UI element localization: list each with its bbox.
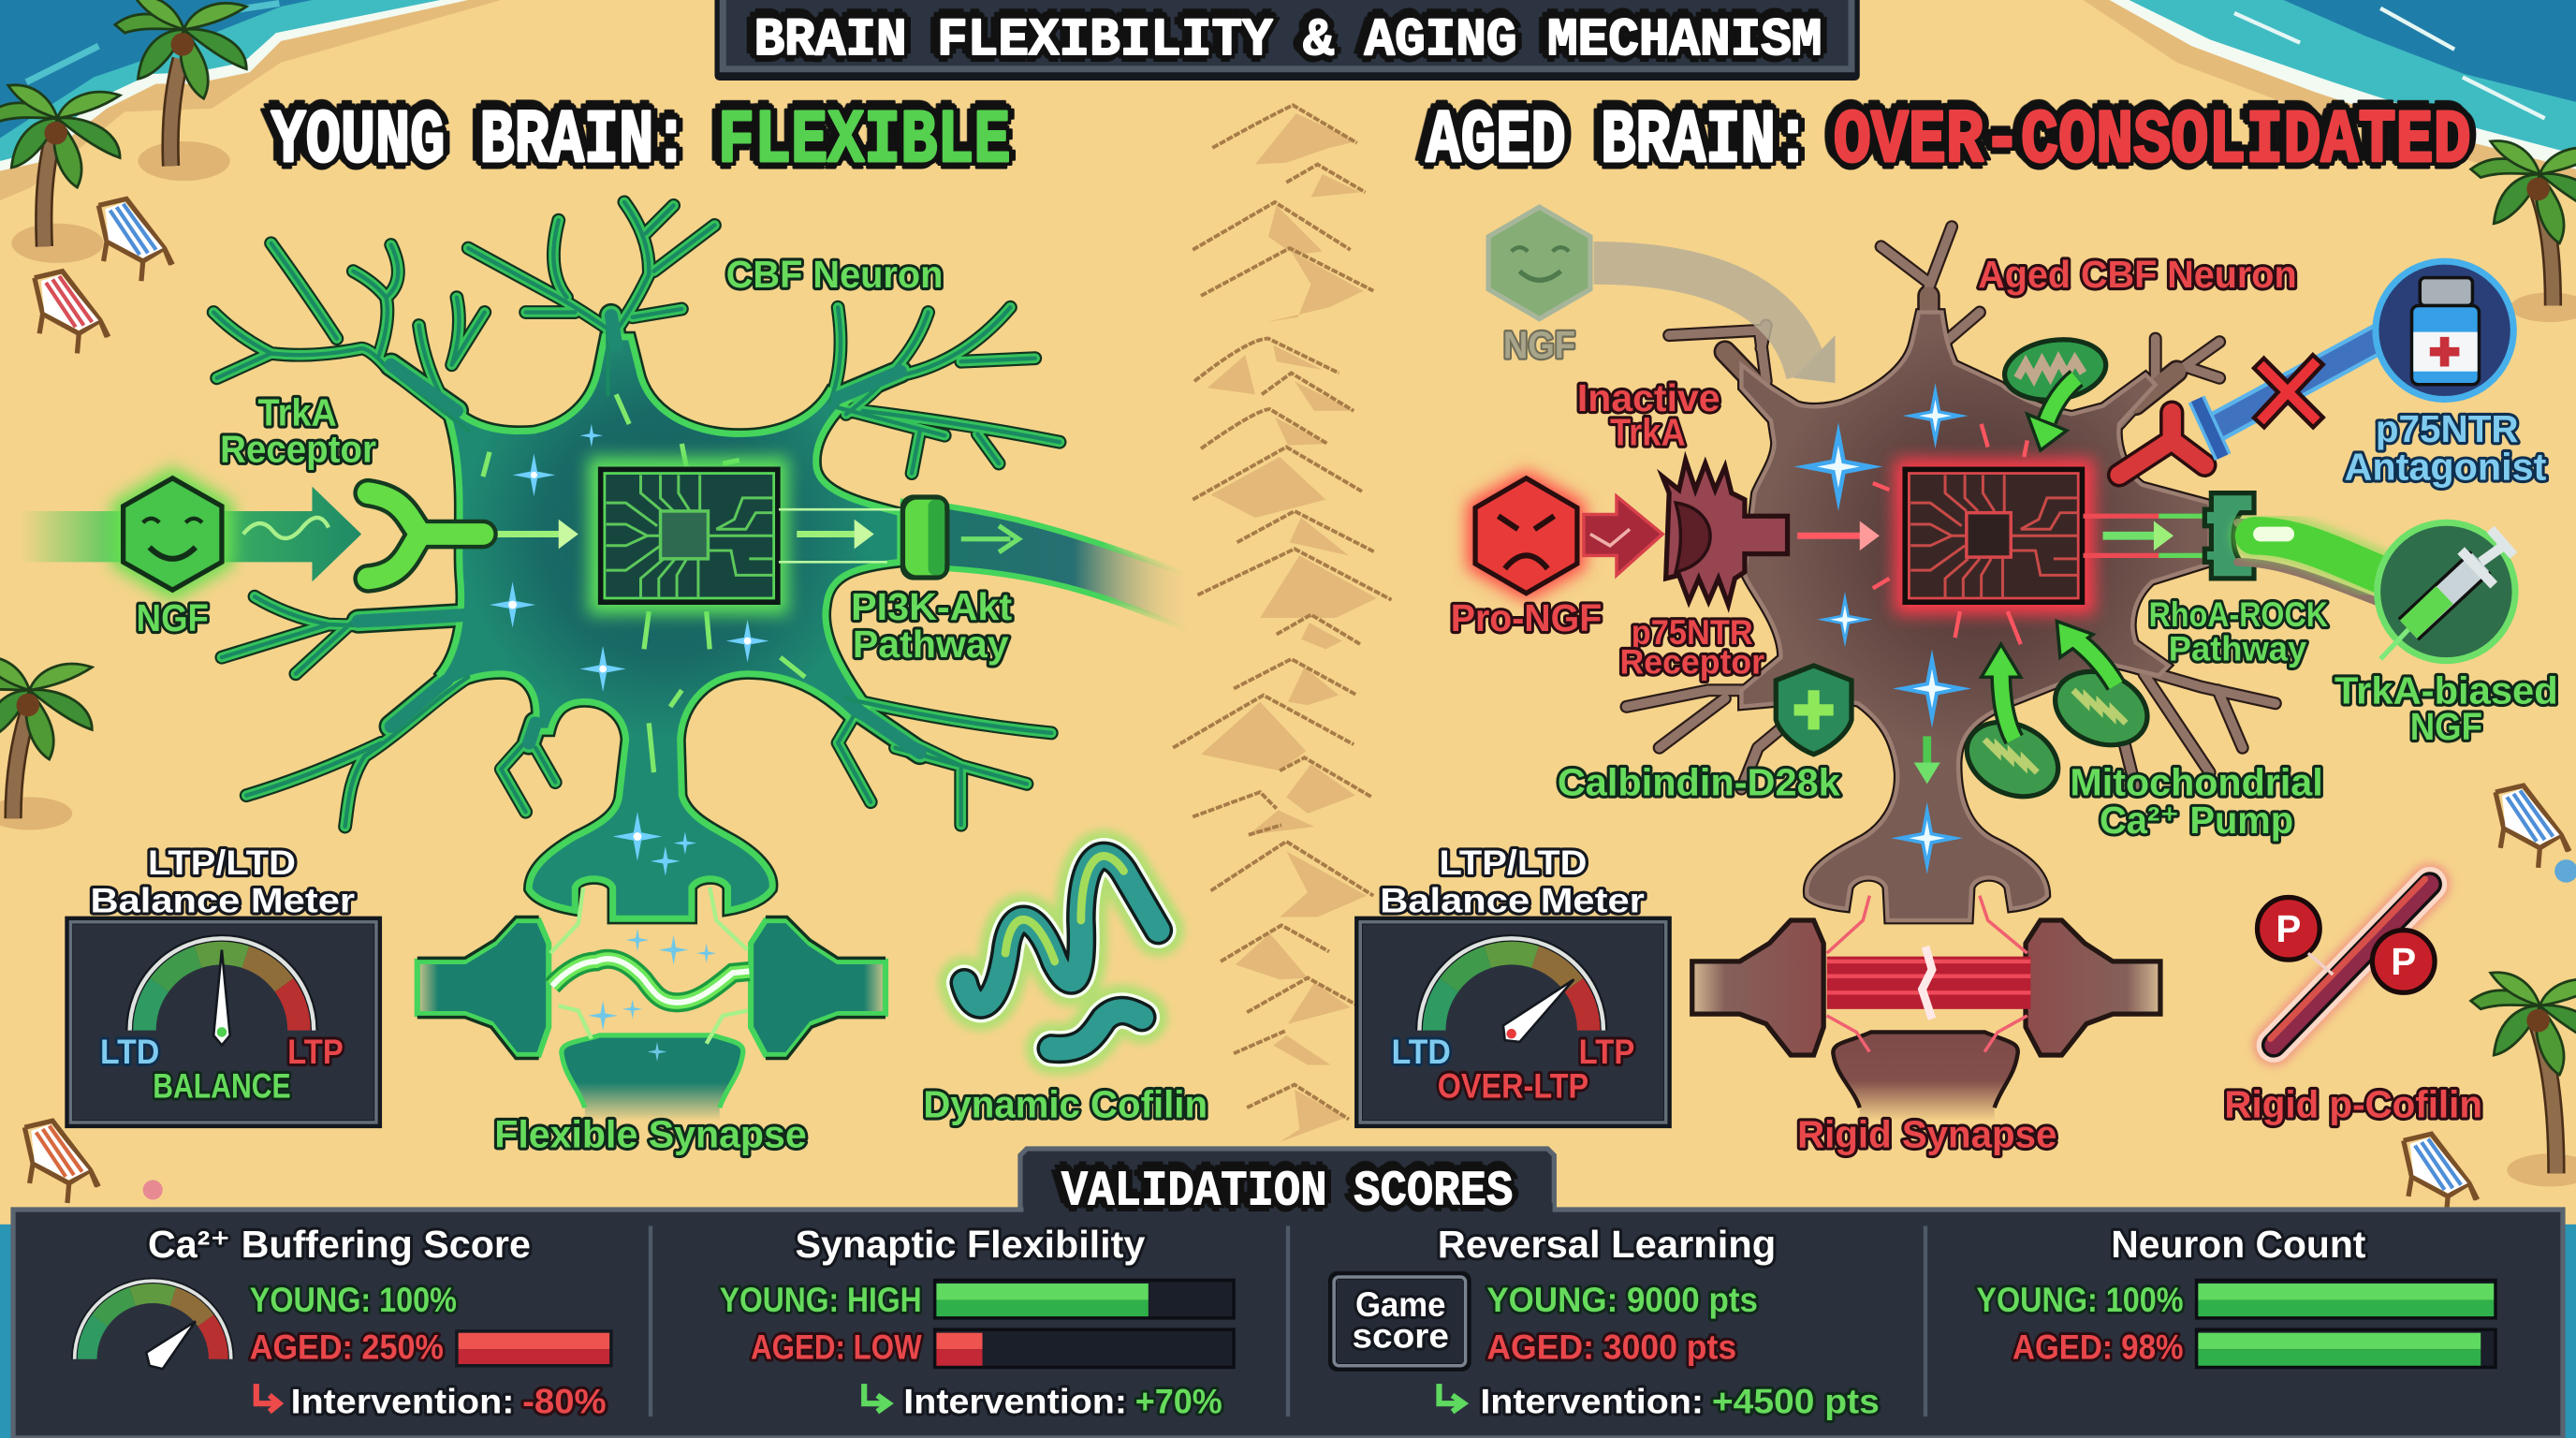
chip traces aged (1910, 475, 2078, 598)
aged balance meter (1358, 844, 1667, 1124)
column: synaptic flexibility (720, 1223, 1234, 1421)
left presynaptic terminal (417, 920, 549, 1055)
column: reversal learning: +4500 pts (1712, 1383, 1880, 1421)
aged labels: Receptor (1620, 643, 1764, 682)
aged labels: Pro-NGF (1451, 596, 1602, 639)
ocean top-right (2083, 0, 2576, 191)
rigid lower spine (1833, 1032, 2018, 1121)
synapse and cofilin labels aged: Rigid Synapse (1797, 1112, 2056, 1155)
column: reversal learning (1332, 1223, 1880, 1421)
synapse and cofilin labels young: Flexible Synapse (494, 1112, 807, 1155)
aged labels: TrkA (1610, 411, 1686, 454)
aged nucleus chip (1873, 424, 2095, 644)
icon: PI3K collar (900, 494, 949, 580)
aged labels: RhoA-ROCK (2149, 595, 2328, 634)
green tube to syringe (2237, 522, 2385, 605)
aged labels: Mitochondrial (2070, 761, 2323, 804)
icon: Pro-NGF angry hexagon (1467, 470, 1586, 601)
young balance meter: LTD (100, 1033, 159, 1071)
young balance meter: LTP/LTD (148, 844, 296, 882)
icon: NGF hexagon happy (111, 467, 233, 601)
heading: young brain flexible: FLEXIBLE (718, 99, 1010, 184)
column: calcium buffering: -80% (522, 1383, 607, 1421)
column: synaptic flexibility: AGED: LOW (751, 1328, 922, 1367)
wavy flexible signal (552, 959, 749, 1003)
icon: RhoA-ROCK gear collar (2204, 493, 2254, 579)
aged balance meter: LTP (1579, 1033, 1634, 1071)
icon: calbindin shield (1776, 666, 1852, 755)
young labels: PI3K-Akt (851, 585, 1012, 628)
column: neuron count (1976, 1223, 2496, 1368)
aged labels: p75NTR (2376, 407, 2519, 450)
column: calcium buffering (75, 1223, 613, 1421)
column: neuron count: AGED: 98% (2012, 1328, 2184, 1367)
aged balance meter: LTP/LTD (1439, 844, 1587, 882)
column: synaptic flexibility: YOUNG: HIGH (720, 1281, 922, 1319)
young sparkles (490, 424, 768, 876)
young CBF neuron (213, 202, 1190, 918)
aged labels: Inactive (1577, 376, 1720, 419)
icon: p75NTR antagonist bottle (2197, 261, 2513, 457)
column: synaptic flexibility: Synaptic Flexibility (795, 1223, 1146, 1266)
young labels: CBF Neuron (726, 253, 943, 296)
icon: mitochondria (1954, 333, 2159, 811)
aged labels: Pathway (2169, 630, 2307, 668)
right postsynaptic terminal (751, 920, 886, 1055)
aged labels (1451, 253, 2558, 842)
flexible synapse (417, 888, 886, 1121)
gauge dial over-LTP (1419, 938, 1603, 1031)
aged balance meter: OVER-LTP (1438, 1067, 1588, 1106)
column: calcium buffering: AGED: 250% (250, 1328, 444, 1367)
palm tree top-left (0, 85, 120, 263)
aged labels: NGF (2410, 705, 2482, 748)
young balance meter (69, 844, 378, 1124)
column: calcium buffering: Intervention: (291, 1383, 514, 1421)
dividers (651, 1226, 1925, 1416)
column: calcium buffering: YOUNG: 100% (250, 1281, 457, 1319)
heading: young brain flexible: YOUNG BRAIN: (271, 99, 688, 184)
ghost NGF hexagon and faded arrow (1488, 207, 1835, 383)
chip traces (607, 475, 774, 598)
column: neuron count: YOUNG: 100% (1976, 1281, 2184, 1319)
gauge needle over-LTP (1503, 979, 1573, 1042)
aged labels: Ca²⁺ Pump (2100, 799, 2293, 842)
gauge needle (213, 950, 230, 1045)
aged balance meter: Balance Meter (1380, 881, 1645, 919)
rigid p-cofilin: P (2391, 940, 2416, 983)
young dendrites and soma (213, 202, 1060, 918)
icon: TrkA receptor (368, 493, 483, 579)
rigid synapse (1692, 896, 2160, 1121)
main panel (13, 1210, 2563, 1438)
young balance meter: LTP (287, 1033, 344, 1071)
lower spine (562, 1035, 743, 1121)
heading: aged brain over-consolidated: AGED BRAIN: (1426, 99, 1810, 184)
column: neuron count: Neuron Count (2111, 1223, 2365, 1266)
young labels: Pathway (853, 623, 1009, 666)
heading: aged brain over-consolidated (1426, 99, 2471, 184)
aged labels: TrkA-biased (2334, 668, 2558, 712)
column: reversal learning: Game (1355, 1285, 1445, 1324)
tab (1020, 1149, 1554, 1213)
ocean bottom edges (0, 1225, 2576, 1438)
aged labels: Aged CBF Neuron (1978, 253, 2297, 296)
synapse and cofilin labels young (494, 1083, 1208, 1155)
column: synaptic flexibility: Intervention: (903, 1383, 1127, 1421)
column: calcium buffering: Ca²⁺ Buffering Score (148, 1223, 531, 1266)
column: reversal learning: AGED: 3000 pts (1486, 1328, 1736, 1367)
ocean top-left (0, 0, 501, 200)
phosphate P badges (2258, 897, 2320, 960)
synapse and cofilin labels aged (1797, 1083, 2482, 1155)
aged labels: Calbindin-D28k (1558, 761, 1840, 804)
rigid left terminal (1692, 920, 1823, 1055)
synapse and cofilin labels young: Dynamic Cofilin (923, 1083, 1208, 1126)
synapse and cofilin labels aged: Rigid p-Cofilin (2224, 1083, 2482, 1126)
column: reversal learning: YOUNG: 9000 pts (1486, 1281, 1758, 1319)
panel: validation scores (13, 1149, 2563, 1438)
aged internal arrows (1797, 516, 2210, 555)
young labels (137, 253, 1012, 666)
aged CBF neuron (1627, 227, 2276, 920)
aged balance meter: LTD (1392, 1033, 1451, 1071)
young balance meter: Balance Meter (91, 881, 355, 919)
young internal arrows (496, 509, 900, 562)
rigid p-cofilin: P (2276, 907, 2301, 950)
rigid red bars (1827, 957, 2030, 1009)
palm tree top-centre-left (115, 0, 246, 181)
palm tree right (2471, 141, 2576, 322)
young green sparks (483, 394, 805, 772)
gauge dial (130, 938, 314, 1031)
title text: BRAIN FLEXIBILITY & AGING MECHANISM (754, 10, 1822, 70)
beach chairs (24, 198, 2576, 1216)
young labels: Receptor (220, 427, 376, 470)
young nucleus chip (588, 457, 788, 615)
red arrow into receptor (1584, 496, 1662, 575)
young axon to the right (900, 501, 1190, 631)
column: reversal learning: score (1352, 1316, 1449, 1355)
young axon arrow (961, 526, 1018, 552)
palm tree left (0, 657, 92, 829)
column: synaptic flexibility: +70% (1135, 1383, 1222, 1421)
title banner (714, 0, 1860, 81)
rigid right terminal (2026, 920, 2160, 1055)
young balance meter: BALANCE (153, 1067, 291, 1106)
aged labels: NGF (1503, 324, 1575, 367)
aged labels: Antagonist (2345, 446, 2546, 489)
column: reversal learning: Reversal Learning (1438, 1223, 1776, 1266)
column: reversal learning: Intervention: (1480, 1383, 1704, 1421)
aged labels: p75NTR (1632, 613, 1753, 652)
aged sparkles (1794, 383, 1971, 874)
icon: red Y receptor (2119, 413, 2204, 475)
dynamic cofilin (964, 856, 1158, 1049)
icon: TrkA-biased NGF syringe (2378, 522, 2515, 661)
young NGF signal band and arrow (20, 487, 361, 581)
rigid p-cofilin (2258, 879, 2435, 1045)
young labels: NGF (137, 596, 209, 639)
icon: p75NTR receptor inactive TrkA (1662, 461, 1788, 605)
icon: red X block (2264, 365, 2313, 418)
young labels: TrkA (258, 391, 337, 434)
palm tree bottom-right (2471, 973, 2576, 1186)
central sand dunes divider (1173, 105, 1392, 1142)
green pump arrows (1914, 378, 2116, 784)
aged dendrites and soma (1627, 227, 2276, 920)
tab heading: VALIDATION SCORES (1061, 1164, 1513, 1220)
